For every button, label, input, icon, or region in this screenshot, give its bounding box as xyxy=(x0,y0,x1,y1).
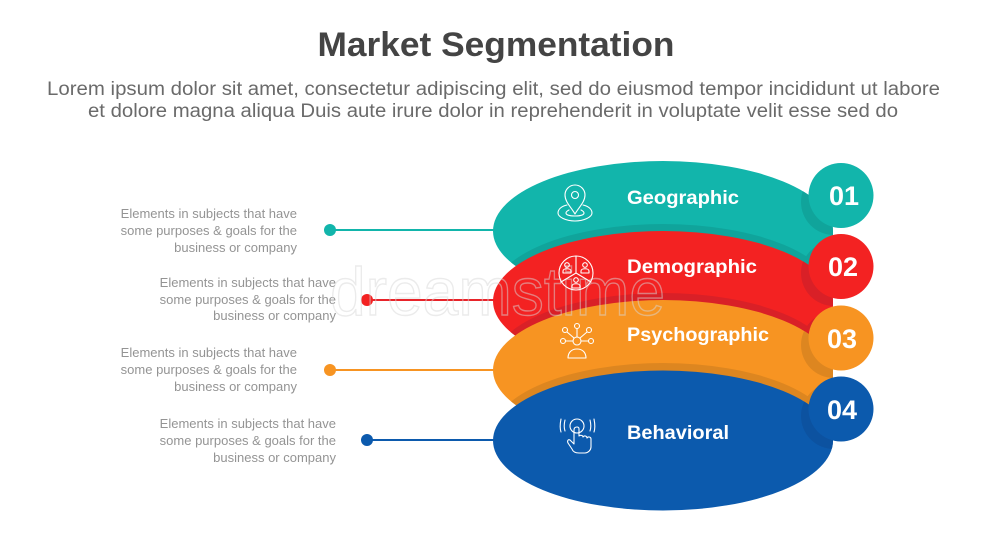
label: Psychographic: Psychographic xyxy=(627,325,769,346)
watermark: dreamstime xyxy=(330,254,665,330)
description 2: some purposes & goals for the xyxy=(160,292,336,307)
connector 3 xyxy=(324,364,496,376)
connector 2 xyxy=(361,294,496,306)
badge 03 xyxy=(808,306,874,370)
badge 03: 03 xyxy=(827,324,857,354)
badge 01: 01 xyxy=(829,181,859,211)
subtitle text: Lorem ipsum dolor sit amet, consectetur adipiscing elit, sed do eiusmod tempor incididunt ut labore xyxy=(47,79,940,100)
icon: location pin xyxy=(558,185,592,221)
description 2: Elements in subjects that have xyxy=(160,275,336,290)
subtitle text: et dolore magna aliqua Duis aute irure dolor in reprehenderit in voluptate velit esse sed do xyxy=(88,101,898,122)
badge 02 xyxy=(808,234,874,299)
description 4 xyxy=(160,416,336,465)
badge 01 xyxy=(808,163,874,228)
description 1: business or company xyxy=(174,240,297,255)
description 1: Elements in subjects that have xyxy=(121,206,297,221)
segment 1: geographic xyxy=(493,161,833,266)
description 1 xyxy=(121,206,297,255)
title: Market Segmentation xyxy=(318,26,674,64)
badge 04 xyxy=(808,376,874,442)
label: Behavioral: Behavioral xyxy=(627,423,729,444)
description 2: business or company xyxy=(213,308,336,323)
description 3: Elements in subjects that have xyxy=(121,345,297,360)
description 4: some purposes & goals for the xyxy=(160,433,336,448)
description 2 xyxy=(160,275,336,323)
badge 04: 04 xyxy=(827,395,857,425)
description 1: some purposes & goals for the xyxy=(121,223,297,238)
label: Geographic: Geographic xyxy=(627,188,739,209)
description 4: Elements in subjects that have xyxy=(160,416,336,431)
description 4: business or company xyxy=(213,450,336,465)
segment 2: demographic xyxy=(493,231,833,336)
connector 1 xyxy=(324,224,496,236)
description 3: some purposes & goals for the xyxy=(121,362,297,377)
icon: mind network xyxy=(560,324,594,358)
label: Demographic: Demographic xyxy=(627,257,757,278)
description 3 xyxy=(121,345,297,394)
icon: demographic pie xyxy=(559,256,593,290)
badge 02: 02 xyxy=(828,252,858,282)
icon: touch hand xyxy=(560,419,595,453)
subtitle text xyxy=(47,79,940,122)
connector 4 xyxy=(361,434,496,446)
segment 4: behavioral xyxy=(493,370,867,510)
description 3: business or company xyxy=(174,379,297,394)
segment 3: psychographic xyxy=(493,300,833,406)
